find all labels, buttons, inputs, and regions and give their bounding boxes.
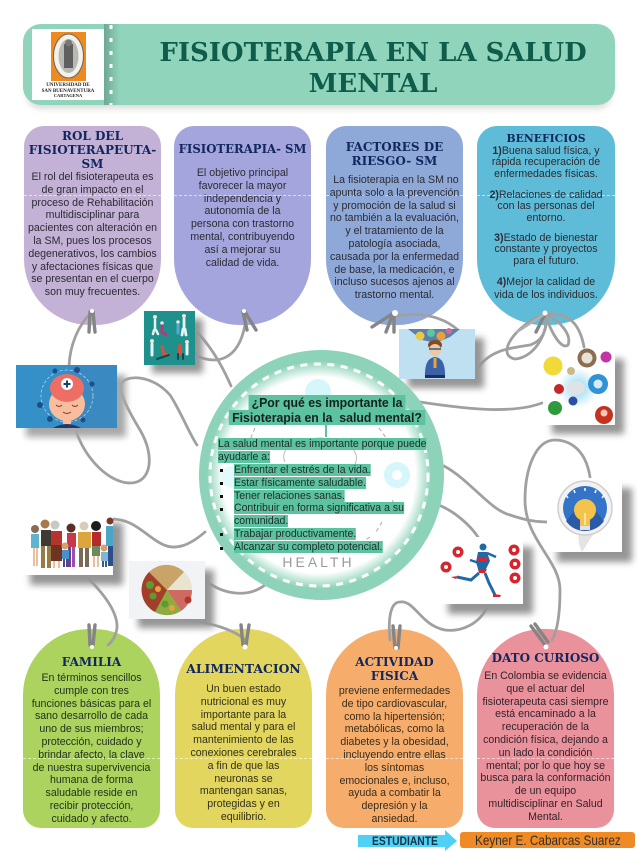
- text: actividad fisica: ansiedad.: [372, 813, 417, 825]
- bullet list: comunidad.: [234, 514, 288, 526]
- heading: familia: FAMILIA: [62, 655, 121, 669]
- text: actividad fisica: metabólicas, como la: [345, 723, 444, 735]
- panel: beneficios: vida de los individuos.: [494, 289, 598, 301]
- question heading: Fisioterapia en la salud mental?: [232, 410, 422, 425]
- text: actividad fisica: los síntomas: [365, 762, 424, 774]
- text: rol: y afectaciones físicas que: [32, 261, 153, 273]
- text: fisioterapia SM: independencia y: [204, 193, 281, 205]
- text: rol: multidisciplinar para: [46, 209, 139, 221]
- heading: factores: FACTORES DE: [346, 140, 443, 154]
- heading: rol: FISIOTERAPEUTA-: [29, 143, 156, 157]
- arrow: [358, 830, 457, 851]
- footer: student credit: [358, 830, 635, 851]
- heading: rol: SM: [82, 157, 103, 171]
- text: factores: de base, la medicación, e: [334, 264, 455, 276]
- text: factores: incluso sucesos ajenos al: [334, 276, 455, 288]
- bullet list: [220, 464, 404, 553]
- bullet list: Tener relaciones sanas.: [234, 490, 345, 502]
- text: familia: humana de forma: [50, 774, 133, 786]
- panel: dato curioso: [477, 629, 614, 828]
- text: actividad fisica: ayuda a combatir la: [348, 787, 441, 799]
- text: factores: patología asociada,: [349, 238, 440, 250]
- central circle: why physiotherapy matters: [199, 350, 444, 600]
- text: alimentacion: importante para la: [201, 709, 286, 721]
- heading: fisioterapia SM: FISIOTERAPIA- SM: [179, 142, 306, 156]
- text: actividad fisica: depresión y la: [362, 800, 427, 812]
- title: FISIOTERAPIA EN LA SALUD: [159, 38, 587, 68]
- panel: familia: [23, 629, 160, 828]
- heading: actividad fisica: ACTIVIDAD: [355, 655, 434, 669]
- title: MENTAL: [309, 69, 437, 99]
- panel: alimentacion: [175, 629, 312, 828]
- heading: actividad fisica: [355, 655, 434, 683]
- text: rol: de gran impacto en el: [42, 184, 143, 196]
- text: familia: cumple con tres: [54, 685, 129, 697]
- panel: beneficios: 2)Relaciones de calidad: [489, 188, 603, 200]
- panel: actividad fisica: [326, 629, 463, 828]
- text: dato curioso: Mental.: [528, 811, 563, 823]
- text: rol: proceso de Rehabilitación: [32, 197, 153, 209]
- text: rol: El rol del fisioterapeuta es: [32, 171, 153, 183]
- text: fisioterapia SM: [190, 167, 295, 269]
- circle background: [199, 350, 444, 600]
- text: factores: trastorno mental.: [355, 289, 434, 301]
- question heading: ¿Por qué es importante la: [252, 395, 402, 410]
- image: thoughtful man: [399, 328, 484, 388]
- text: dato curioso: multidisciplinar en Salud: [488, 798, 603, 810]
- text: actividad fisica: previene enfermedades: [339, 685, 450, 697]
- panel: beneficios: con las personas del: [497, 200, 595, 212]
- bullet list: Alcanzar su completo potencial.: [234, 540, 382, 552]
- text: dato curioso: busca para la conformación: [480, 772, 611, 784]
- text: factores: y el tratamiento de la: [345, 225, 444, 237]
- text: actividad fisica: de tipo cardiovascular,: [342, 698, 447, 710]
- text: dato curioso: un lado la condición: [499, 747, 592, 759]
- text: alimentacion: salud mental y para el: [192, 721, 295, 733]
- heading: rol: ROL DEL: [62, 129, 123, 143]
- text: factores: y promoción de la salud si: [333, 200, 456, 212]
- image: brain and calm face: [16, 365, 126, 437]
- logo: Universidad de San Buenaventura: CARTAGENA: [54, 93, 83, 98]
- text: factores: causada por la enfermedad: [330, 251, 459, 263]
- text: fisioterapia SM: autonomía de la: [205, 205, 280, 217]
- text: actividad fisica: como la hipertensión;: [344, 711, 445, 723]
- logo: Universidad de San Buenaventura: [32, 29, 104, 100]
- text: familia: sano desarrollo de cada: [35, 710, 148, 722]
- bullet list: Contribuir en forma significativa a su: [234, 502, 404, 514]
- text: dato curioso: de un equipo: [515, 785, 576, 797]
- text: beneficios: [492, 144, 600, 180]
- bullet list: Enfrentar el estrés de la vida.: [234, 464, 371, 476]
- text: factores: apunta solo a la prevención: [330, 187, 459, 199]
- text: dato curioso: está encaminado a la: [495, 708, 596, 720]
- intro text: La salud mental es importante porque puede: [218, 438, 427, 450]
- logo: Universidad de San Buenaventura: UNIVERSIDAD DE: [46, 83, 90, 88]
- text: familia: funciones básicas para el: [32, 698, 151, 710]
- intro text: ayudarle a:: [218, 451, 270, 463]
- text: rol: la SM, pues los procesos: [33, 235, 152, 247]
- text: alimentacion: protegidas y en: [207, 798, 280, 810]
- text: dato curioso: En Colombia se evidencia: [484, 670, 607, 682]
- text: familia: [32, 672, 151, 825]
- title: [159, 38, 587, 99]
- text: alimentacion: nutricional es muy: [201, 696, 286, 708]
- panel: beneficios: [477, 126, 615, 325]
- text: actividad fisica: incluyendo entre ellas: [343, 749, 446, 761]
- heading: dato curioso: DATO CURIOSO: [492, 651, 599, 665]
- heading: factores: [346, 140, 443, 168]
- heading: rol: [29, 129, 156, 171]
- text: familia: En términos sencillos: [41, 672, 142, 684]
- text: fisioterapia SM: favorecer la mayor: [199, 180, 286, 192]
- text: alimentacion: Un buen estado: [206, 683, 281, 695]
- heading: factores: RIESGO- SM: [352, 154, 437, 168]
- text: familia: recibir protección,: [50, 800, 133, 812]
- text: fisioterapia SM: así a mejorar su: [205, 244, 280, 256]
- text: dato curioso: recuperación de la: [502, 721, 589, 733]
- text: familia: de nuestra supervivencia: [33, 762, 150, 774]
- name: Keyner E. Cabarcas Suarez: [475, 832, 621, 848]
- bullet list: Trabajar productivamente.: [234, 528, 356, 540]
- text: alimentacion: equilibrio.: [221, 811, 266, 823]
- text: alimentacion: a fin de que las: [208, 760, 279, 772]
- text: alimentacion: [190, 683, 296, 823]
- logo: Universidad de San Buenaventura: SAN BUENAVENTURA: [42, 89, 95, 94]
- text: beneficios: rápida recuperación de: [492, 156, 600, 168]
- text: alimentacion: mantenimiento de las: [193, 734, 294, 746]
- intro text: [218, 438, 427, 463]
- text: familia: brindar afecto, la clave: [38, 749, 145, 761]
- text: fisioterapia SM: persona con trastorno: [191, 218, 294, 230]
- heading: actividad fisica: FISICA: [371, 669, 418, 683]
- heading: beneficios: BENEFICIOS: [506, 132, 586, 145]
- text: rol: [28, 171, 157, 298]
- header banner: [23, 24, 615, 111]
- name bar: [460, 832, 635, 848]
- text: alimentacion: mantengan sanas,: [200, 785, 287, 797]
- text: rol: son muy frecuentes.: [45, 286, 140, 298]
- image: light bulb speech badge: [547, 478, 632, 562]
- panel: beneficios: 4)Mejor la calidad de: [497, 276, 595, 288]
- panel: beneficios: constante y proyectos: [494, 243, 598, 255]
- text: dato curioso: [480, 670, 611, 823]
- panel: rol del fisioterapeuta: [24, 126, 161, 325]
- text: actividad fisica: [339, 685, 450, 825]
- text: rol: pacientes con alteración en: [28, 222, 157, 234]
- panel: factores de riesgo: [326, 126, 463, 325]
- text: beneficios: 1)Buena salud física, y: [492, 144, 600, 156]
- text: familia: cuidado y afecto.: [51, 813, 132, 825]
- panel: fisioterapia SM: [174, 126, 311, 325]
- text: beneficios: enfermedades físicas.: [494, 168, 598, 180]
- image: food plate: [129, 561, 214, 628]
- panel: beneficios: para el futuro.: [513, 255, 579, 267]
- panel: beneficios: 3)Estado de bienestar: [494, 232, 598, 244]
- question heading: [228, 395, 426, 425]
- text: rol: degenerativos, los cambios: [28, 248, 157, 260]
- image: family group: [20, 513, 123, 585]
- panel: beneficios: entorno.: [527, 212, 565, 224]
- text: fisioterapia SM: calidad de vida.: [206, 257, 279, 269]
- text: familia: saludable reside en: [46, 787, 137, 799]
- text: rol: se presentan en el cuerpo: [31, 273, 154, 285]
- text: actividad fisica: emocionales e, incluso,: [339, 775, 450, 787]
- text: alimentacion: conexiones cerebrales: [190, 747, 296, 759]
- text: factores: La fisioterapia en la SM no: [333, 174, 459, 186]
- stem: [325, 425, 327, 437]
- heading: alimentacion: ALIMENTACION: [186, 661, 301, 676]
- text: factores: no también a la evaluación,: [330, 212, 459, 224]
- text: fisioterapia SM: mental, contribuyendo: [190, 231, 295, 243]
- text: familia: protección, cuidado y: [41, 736, 142, 748]
- label: estudiante: ESTUDIANTE: [372, 834, 438, 848]
- bullet list: Estar físicamente saludable.: [234, 476, 366, 488]
- image: colored bubbles around brain: [543, 348, 624, 434]
- text: dato curioso: mental; por lo que hoy se: [486, 760, 605, 772]
- HEALTH word: HEALTH: [282, 554, 355, 570]
- text: actividad fisica: diabetes y la obesidad,: [340, 736, 449, 748]
- text: dato curioso: fisioterapeuta casi siempre: [482, 696, 609, 708]
- text: fisioterapia SM: El objetivo principal: [197, 167, 288, 179]
- image: teal physiotherapy scenes: [144, 311, 203, 373]
- image: runner with health icons: [438, 537, 533, 614]
- text: familia: uno de sus miembros;: [39, 723, 144, 735]
- text: factores: [330, 174, 459, 301]
- text: dato curioso: condición física, dejando a: [483, 734, 608, 746]
- text: alimentacion: neuronas se: [214, 773, 273, 785]
- text: dato curioso: que el actuar del: [506, 683, 585, 695]
